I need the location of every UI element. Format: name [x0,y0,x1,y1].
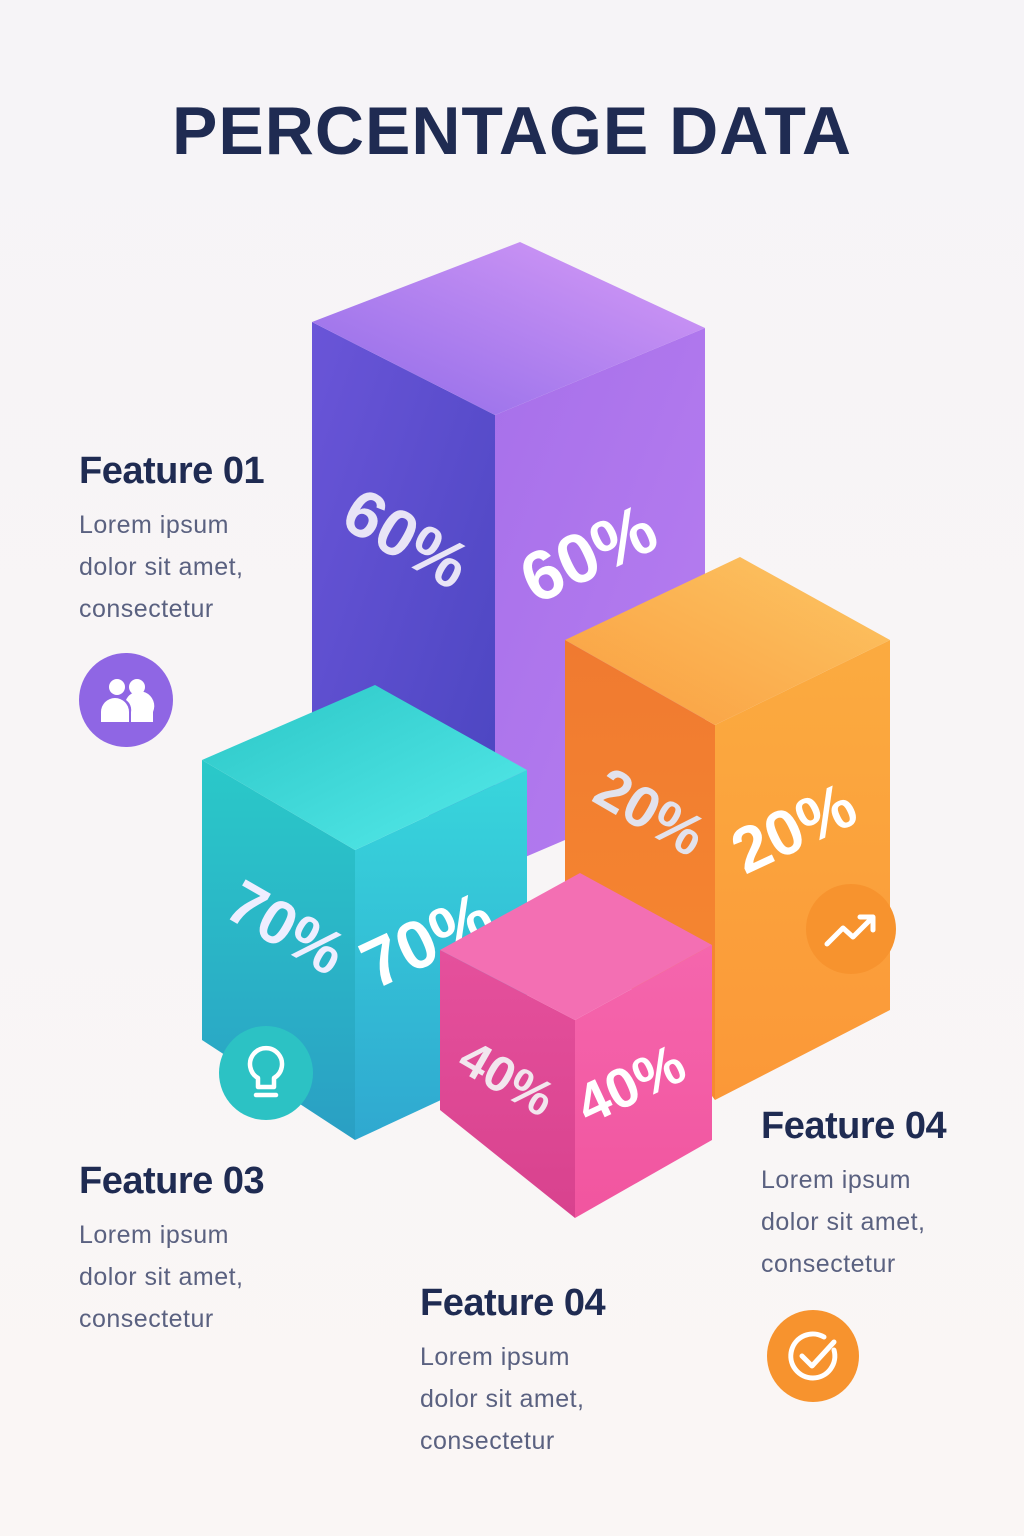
body: feature 04 right: Lorem ipsum [761,1166,911,1194]
bar: purple 60%: 60% [508,489,668,619]
text: feature 03 [79,1160,264,1333]
body: feature 01: dolor sit amet, [79,553,244,581]
body: feature 04 bottom [420,1343,585,1455]
bar: pink 40%: 40% [566,1031,695,1136]
title: PERCENTAGE DATA [172,93,852,169]
heading: feature 04 right: Feature 04 [761,1105,946,1147]
body: feature 03: consectetur [79,1305,214,1333]
bar: teal 70%: 70% [349,877,505,1004]
bar: purple 60%: 60% [331,473,482,603]
icon: lightbulb [219,1026,313,1120]
heading: feature 04 bottom: Feature 04 [420,1282,605,1324]
bar: purple 60% [312,242,705,870]
icon: check [767,1310,859,1402]
bar: pink 40% [440,873,712,1218]
body: feature 03: dolor sit amet, [79,1263,244,1291]
body: feature 01: Lorem ipsum [79,511,229,539]
bar: teal 70% [202,685,527,1140]
bar: teal 70%: 70% [215,867,357,989]
body: feature 04 right [761,1166,926,1278]
body: feature 04 bottom: dolor sit amet, [420,1385,585,1413]
body: feature 04 right: consectetur [761,1250,896,1278]
bar: orange 20%: 20% [584,755,717,869]
body: feature 04 right: dolor sit amet, [761,1208,926,1236]
body: feature 01: consectetur [79,595,214,623]
body: feature 04 bottom: Lorem ipsum [420,1343,570,1371]
text: feature 04 right [761,1105,946,1278]
bar: orange 20%: 20% [720,768,867,888]
text: feature 01 [79,450,264,623]
icon: people [79,653,173,747]
bar: pink 40%: 40% [450,1029,564,1128]
icon: trend arrow [806,884,896,974]
heading: feature 03: Feature 03 [79,1160,264,1202]
heading: feature 01: Feature 01 [79,450,264,492]
body: feature 01 [79,511,244,623]
body: feature 03: Lorem ipsum [79,1221,229,1249]
text: feature 04 bottom [420,1282,606,1455]
bar: orange 20% [565,557,890,1100]
body: feature 03 [79,1221,244,1333]
body: feature 04 bottom: consectetur [420,1427,555,1455]
